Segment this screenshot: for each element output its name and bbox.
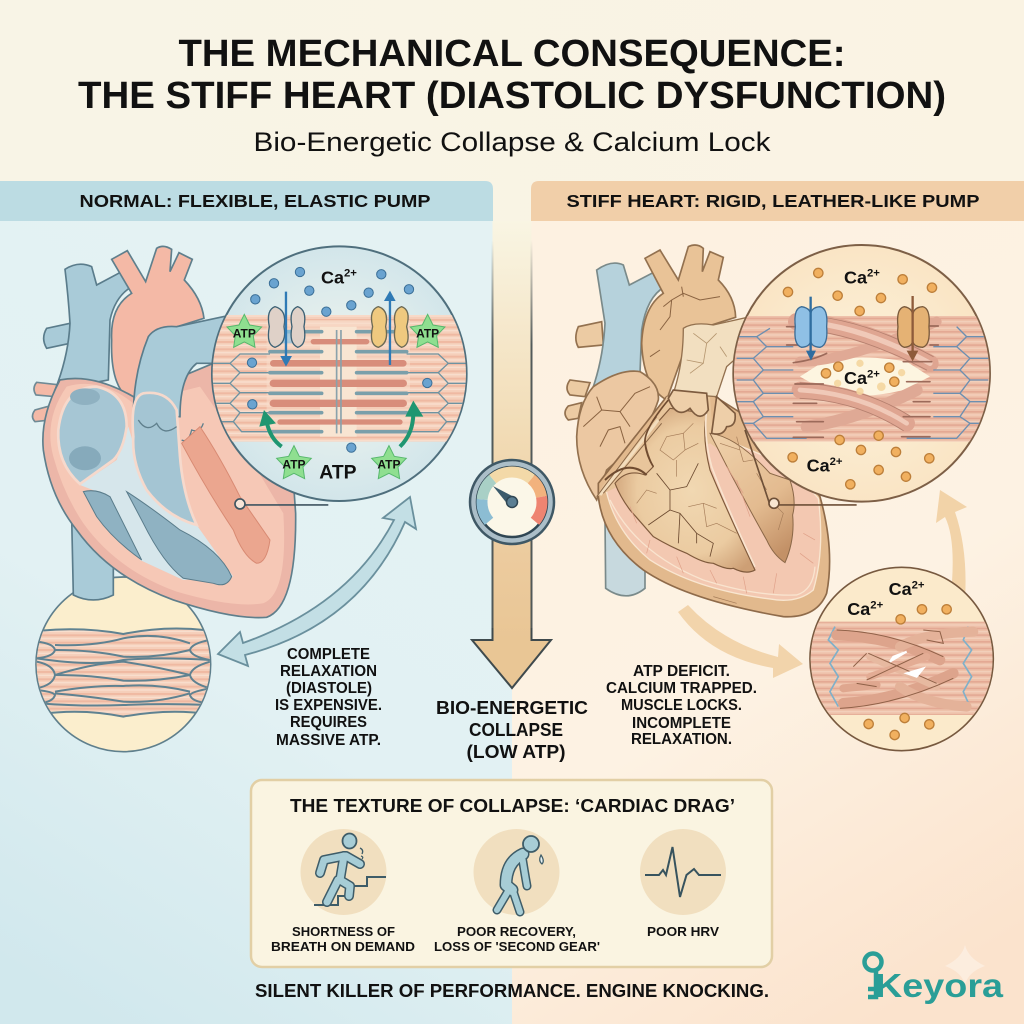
vein stub — [44, 323, 70, 348]
channel: tan — [898, 296, 929, 361]
descending aorta — [72, 517, 113, 600]
logo: keyora — [864, 945, 1004, 1004]
aorta — [642, 245, 736, 400]
ATP green arrows — [267, 413, 413, 447]
channel: blue — [795, 297, 827, 361]
inset circle: broken fibers: Ca — [847, 599, 870, 619]
subtitle: Bio-Energetic Collapse & Calcium Lock — [254, 127, 771, 157]
aorta — [112, 246, 204, 402]
label: Ca2+ bottom: 2+ — [830, 456, 843, 468]
arrow: up to magnifier — [936, 490, 967, 600]
valves — [668, 390, 735, 434]
center label: (LOW ATP) — [466, 741, 566, 762]
thick filaments — [273, 342, 403, 422]
pale septum band — [80, 427, 233, 580]
center label — [436, 697, 588, 762]
cavity cracks — [648, 463, 713, 557]
sarcomere edge lines — [737, 327, 988, 438]
pulmonary artery — [133, 316, 227, 417]
calcium dots — [247, 267, 432, 452]
ATP star — [410, 314, 445, 347]
ATP star: ATP — [233, 326, 256, 340]
right cavity — [710, 433, 794, 563]
ATP star: ATP — [377, 458, 401, 472]
heart body — [43, 363, 296, 618]
title — [78, 33, 946, 117]
caption: atp deficit: CALCIUM TRAPPED. — [606, 680, 757, 697]
caption: relaxation: IS EXPENSIVE. — [275, 697, 382, 714]
superior vena cava — [593, 263, 665, 387]
caption: relaxation: COMPLETE — [287, 646, 370, 663]
trapped calcium window — [800, 357, 930, 396]
header: stiff: STIFF HEART: RIGID, LEATHER-LIKE PUMP — [566, 191, 980, 211]
thin filaments — [270, 332, 407, 432]
gauge — [470, 460, 554, 544]
inset circle: broken fibers: Ca — [889, 579, 912, 599]
left ventricle — [182, 427, 270, 563]
inset circle: broken fibers: 2+ — [870, 599, 884, 611]
pink wall — [605, 427, 821, 600]
magnifier: normal sarcomere — [210, 246, 470, 509]
caption: atp deficit — [606, 663, 757, 748]
label: Ca2+ middle: Ca — [844, 368, 867, 388]
label: shortness of breath — [271, 924, 415, 954]
label: shortness of breath: BREATH ON DEMAND — [271, 939, 415, 954]
icon: heart rate trace — [640, 829, 726, 915]
valve — [138, 420, 203, 441]
logo: keyora: Keyora — [875, 967, 1004, 1004]
right ventricle outflow — [133, 393, 197, 525]
heart: stiff leathery — [565, 245, 830, 617]
upper septal tan fill — [597, 397, 790, 500]
caption: relaxation: REQUIRES — [290, 714, 367, 731]
label: Ca2+: 2+ — [344, 268, 357, 280]
pale band and dark arcs — [597, 400, 815, 595]
footer line: SILENT KILLER OF PERFORMANCE. ENGINE KNOCKING. — [255, 980, 769, 1001]
caption: atp deficit: RELAXATION. — [631, 731, 732, 748]
superior vena cava — [55, 264, 132, 390]
label: Ca2+ top: 2+ — [867, 268, 880, 280]
label: Ca2+: Ca — [321, 267, 344, 287]
channel: left — [268, 292, 305, 367]
label: ATP: ATP — [319, 462, 357, 483]
main cavity — [615, 408, 755, 572]
title: THE STIFF HEART (DIASTOLIC DYSFUNCTION) — [78, 75, 946, 117]
inset circle: broken fibers: 2+ — [912, 579, 925, 591]
lower chambers — [597, 393, 830, 617]
callout pointer — [235, 499, 328, 509]
label: poor hrv: POOR HRV — [647, 924, 719, 939]
ATP star — [227, 314, 262, 347]
icon: climbing stairs — [300, 829, 386, 915]
right atrium — [58, 387, 127, 484]
descending aorta — [605, 517, 645, 596]
ATP star — [372, 446, 406, 479]
label: poor recovery: POOR RECOVERY, — [457, 924, 576, 939]
right atrium — [577, 371, 658, 500]
ATP star — [277, 446, 311, 479]
ATP star: ATP — [416, 326, 439, 340]
z line — [337, 330, 341, 433]
center label: BIO-ENERGETIC — [436, 697, 588, 718]
central arrow: bio-energetic collapse — [472, 221, 551, 688]
upper cracks — [583, 287, 720, 447]
header: normal — [0, 181, 493, 221]
twisted bundles — [797, 315, 937, 431]
header: normal: NORMAL: FLEXIBLE, ELASTIC PUMP — [80, 191, 431, 211]
pulmonary trunk — [673, 316, 753, 397]
panel: cardiac drag — [251, 780, 772, 967]
label: poor recovery — [434, 924, 600, 954]
caption: atp deficit: ATP DEFICIT. — [633, 663, 730, 680]
curved arrow: relaxation — [218, 497, 416, 666]
label: shortness of breath: SHORTNESS OF — [292, 924, 395, 939]
stubs — [565, 322, 603, 420]
caption: relaxation: RELAXATION — [280, 663, 377, 680]
channel: right — [371, 291, 408, 365]
inset circle: relaxed muscle fibers — [33, 577, 213, 752]
caption: atp deficit: MUSCLE LOCKS. — [621, 697, 742, 714]
label: Ca2+ bottom: Ca — [807, 456, 830, 476]
icon: exhausted figure — [474, 829, 560, 915]
center label: COLLAPSE — [469, 719, 563, 740]
label: Ca2+ middle: 2+ — [867, 368, 880, 380]
label: poor recovery: LOSS OF 'SECOND GEAR' — [434, 939, 600, 954]
caption: atp deficit: INCOMPLETE — [632, 715, 731, 732]
ATP star: ATP — [282, 458, 306, 472]
panel heading: THE TEXTURE OF COLLAPSE: ‘CARDIAC DRAG’ — [290, 795, 735, 816]
calcium dots — [783, 268, 937, 489]
heart outer wall — [598, 393, 830, 617]
header: stiff — [531, 181, 1024, 221]
label: Ca2+ top: Ca — [844, 267, 867, 287]
caption: relaxation — [275, 646, 382, 749]
right ventricle — [83, 491, 232, 585]
caption: relaxation: (DIASTOLE) — [286, 680, 372, 697]
myocardium — [50, 384, 284, 604]
callout pointer — [745, 430, 857, 508]
caption: relaxation: MASSIVE ATP. — [276, 732, 381, 749]
heart: normal flexible — [32, 246, 296, 618]
pulmonary stubs — [32, 382, 60, 422]
inset circle: broken fibers — [810, 567, 993, 751]
title: THE MECHANICAL CONSEQUENCE: — [178, 33, 846, 75]
arrow: to broken fibers — [678, 605, 803, 678]
magnifier: locked sarcomere — [732, 245, 995, 508]
